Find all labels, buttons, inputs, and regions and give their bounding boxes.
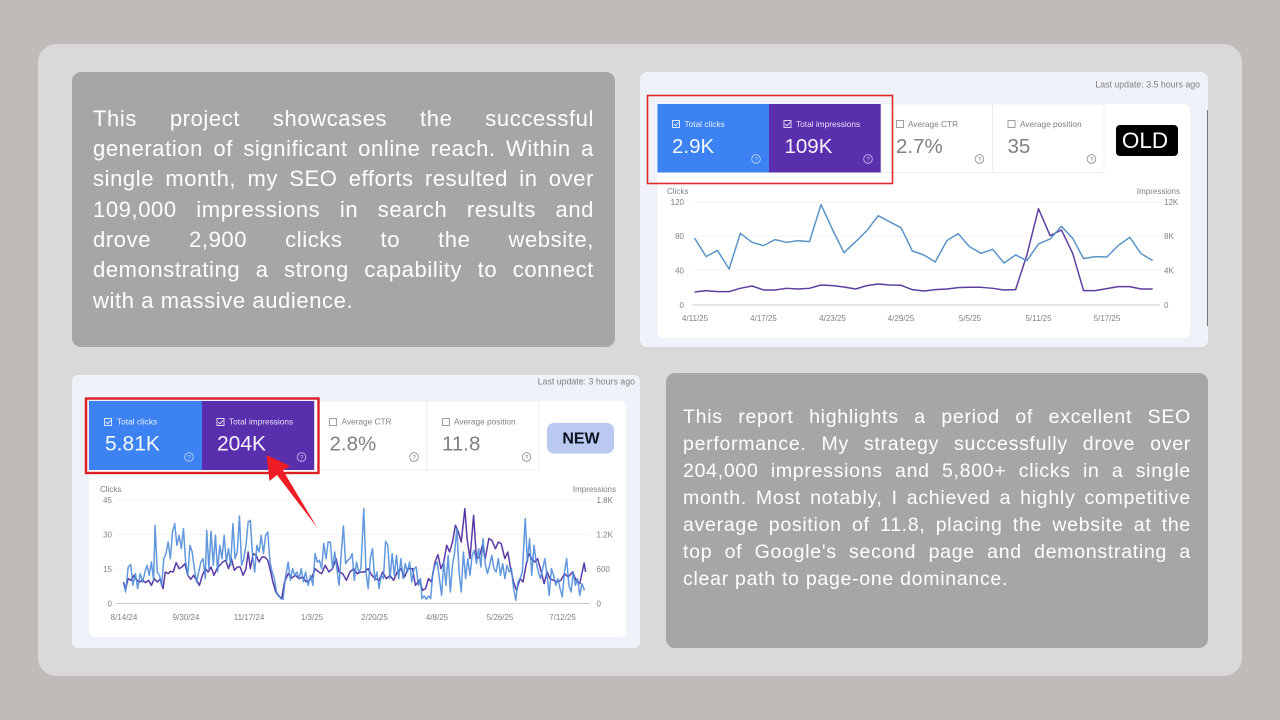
metric: average CTR: [881, 104, 992, 172]
metric: average position: ?: [1090, 156, 1094, 164]
text panel: project summary: generation of significant online reach. Within a: [93, 136, 594, 161]
line chart: new clicks and impressions: 5/26/25: [487, 613, 514, 622]
metric: average position: Average position: [1020, 119, 1082, 129]
text panel: project summary: [72, 72, 615, 347]
line chart: old clicks and impressions: 4/29/25: [888, 314, 915, 323]
line chart: old clicks and impressions: 5/5/25: [959, 314, 982, 323]
metric: total clicks: Total clicks: [684, 119, 725, 129]
line chart: new clicks and impressions: 7/12/25: [549, 613, 576, 622]
line chart: new clicks and impressions: [100, 485, 616, 622]
text panel: report highlights: top of Google's second page and demonstrating a: [683, 541, 1191, 563]
line chart: old clicks and impressions: 40: [675, 266, 685, 276]
chart card: [89, 401, 626, 637]
line chart: old clicks and impressions: 12K: [1164, 198, 1179, 207]
line chart: old clicks and impressions: 0: [1164, 301, 1169, 310]
line chart: old clicks and impressions: 4/23/25: [819, 314, 846, 323]
line chart: new clicks and impressions: 15: [103, 565, 113, 574]
line chart: new clicks and impressions: 8/14/24: [111, 613, 138, 622]
metric: total impressions: ?: [866, 156, 870, 164]
line chart: new clicks and impressions: Impressions: [573, 485, 616, 494]
metric: average position: Average position: [454, 416, 516, 426]
metric: average position: [427, 401, 539, 470]
panel: old dashboard: [640, 72, 1208, 347]
text panel: report highlights: performance. My strategy successfully drove over: [683, 433, 1191, 455]
metric: average position: [992, 104, 1104, 172]
line chart: new clicks and impressions: 1.2K: [596, 530, 614, 540]
line chart: new clicks and impressions: 600: [596, 565, 610, 574]
red highlight box: [648, 96, 892, 184]
metric: average CTR: Average CTR: [342, 416, 392, 426]
line chart: new clicks and impressions: 2/20/25: [361, 613, 388, 622]
line chart: new clicks and impressions: 30: [103, 530, 113, 540]
line chart: old clicks and impressions: Clicks: [667, 187, 688, 196]
metric: average CTR: ?: [978, 156, 982, 164]
metric: total impressions: [769, 104, 881, 172]
line chart: new clicks and impressions: 1.8K: [596, 496, 614, 505]
line chart: old clicks and impressions: 5/17/25: [1094, 314, 1121, 323]
line chart: new clicks and impressions: 1/3/25: [301, 613, 324, 622]
line chart: new clicks and impressions: Clicks: [100, 485, 121, 494]
last update label: Last update: 3 hours ago: [538, 376, 635, 386]
text panel: report highlights: 204,000 impressions and 5,800+ clicks in a single: [683, 460, 1191, 482]
text panel: report highlights: [666, 373, 1208, 648]
text panel: project summary: demonstrating a strong capability to connect: [93, 257, 594, 282]
line chart: new clicks and impressions: 0: [108, 600, 113, 608]
metric: average CTR: Average CTR: [908, 119, 958, 129]
metric: total clicks: [658, 104, 769, 172]
line chart: old clicks and impressions: 4K: [1164, 266, 1174, 276]
text panel: report highlights: clear path to page-one dominance.: [683, 568, 1008, 590]
metric: average CTR: ?: [412, 454, 416, 462]
text panel: project summary: single month, my SEO efforts resulted in over: [93, 166, 594, 191]
last update label: Last update: 3.5 hours ago: [1095, 80, 1200, 90]
line chart: new clicks and impressions: 4/8/25: [426, 613, 449, 622]
metric: total clicks: ?: [754, 156, 758, 164]
tag: OLD: [1116, 125, 1178, 156]
arrow: red pointer to impressions: [266, 455, 318, 528]
metric: total clicks: 5.81K: [105, 432, 160, 456]
line chart: old clicks and impressions: 4/11/25: [682, 314, 709, 323]
metric: total impressions: ?: [300, 454, 304, 462]
metric: total impressions: [202, 401, 314, 470]
metric: average position: ?: [525, 454, 529, 462]
metric: total clicks: 2.9K: [672, 135, 714, 158]
metric: average position: 11.8: [442, 432, 480, 456]
line chart: new clicks and impressions: 45: [103, 496, 113, 505]
metric: total impressions: Total impressions: [796, 119, 860, 129]
metric: total impressions: 204K: [217, 432, 266, 456]
text panel: report highlights: average position of 11.8, placing the website at the: [683, 514, 1191, 536]
text panel: report highlights: This report highlights a period of excellent SEO: [683, 406, 1191, 428]
metric: total impressions: 109K: [784, 135, 833, 158]
metric: total clicks: ?: [187, 454, 191, 462]
text panel: report highlights: month. Most notably, I achieved a highly competitive: [683, 487, 1191, 509]
line chart: new clicks and impressions: 9/30/24: [173, 613, 200, 622]
text panel: project summary: 109,000 impressions in search results and: [93, 197, 594, 222]
text panel: project summary: with a massive audience.: [93, 288, 353, 313]
line chart: old clicks and impressions: 120: [671, 198, 685, 207]
metric: total impressions: Total impressions: [229, 416, 293, 426]
line chart: old clicks and impressions: 4/17/25: [750, 314, 777, 323]
line chart: old clicks and impressions: Impressions: [1137, 187, 1180, 196]
metric: average CTR: 2.8%: [330, 432, 376, 456]
tag: NEW: [547, 423, 614, 454]
text panel: project summary: drove 2,900 clicks to the website,: [93, 227, 594, 252]
red highlight box: [86, 398, 318, 473]
metric: average position: 35: [1008, 135, 1030, 158]
line chart: old clicks and impressions: 5/11/25: [1025, 314, 1052, 323]
chart card: [658, 104, 1190, 338]
line chart: old clicks and impressions: 8K: [1164, 232, 1174, 241]
metric: total clicks: [89, 401, 202, 470]
line chart: old clicks and impressions: 80: [675, 232, 685, 241]
metric: total clicks: Total clicks: [117, 416, 157, 426]
panel: new dashboard: [72, 375, 640, 648]
text panel: project summary: This project showcases the successful: [93, 106, 594, 131]
line chart: new clicks and impressions: 0: [596, 600, 602, 608]
line chart: old clicks and impressions: 0: [680, 301, 685, 310]
metric: average CTR: [314, 401, 427, 470]
line chart: new clicks and impressions: 11/17/24: [234, 613, 265, 622]
tag: OLD: OLD: [1122, 128, 1168, 153]
tag: NEW: NEW: [562, 430, 601, 448]
line chart: old clicks and impressions: [667, 187, 1180, 323]
metric: average CTR: 2.7%: [896, 135, 943, 158]
